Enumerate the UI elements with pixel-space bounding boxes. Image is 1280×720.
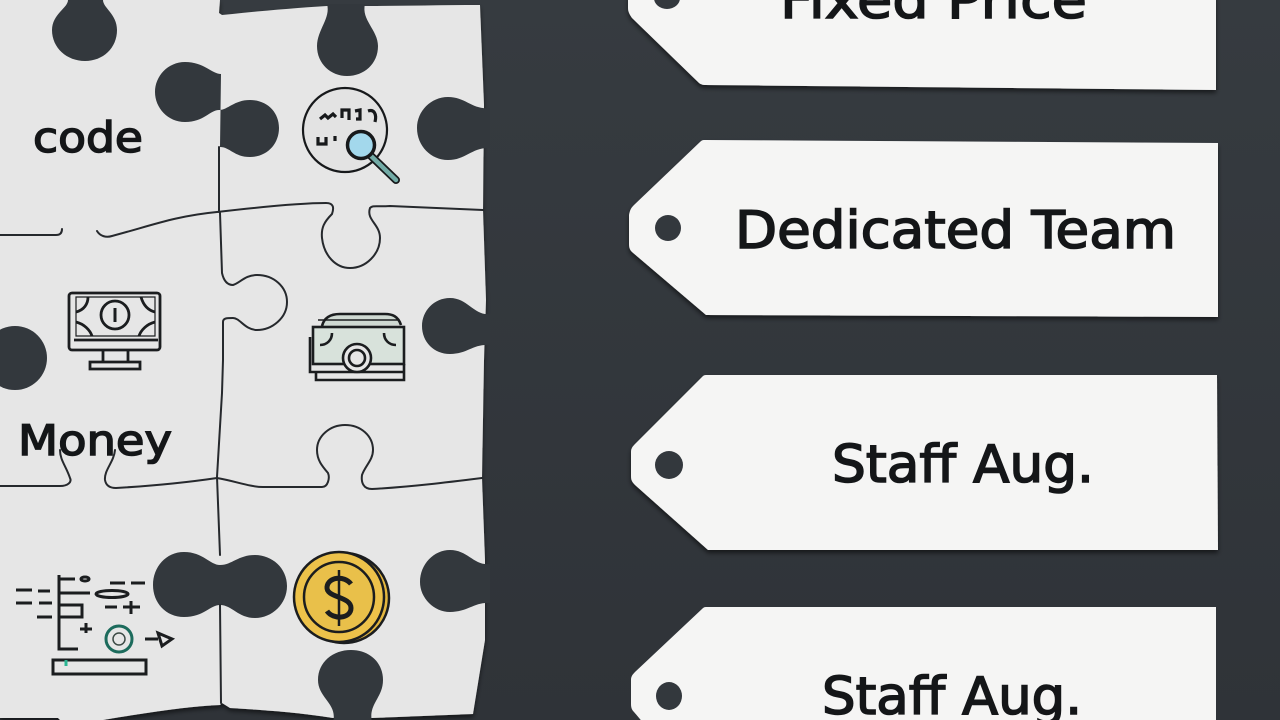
- icon: monitor with banknote: [69, 293, 160, 369]
- tag: Staff Aug.: Staff Aug.: [832, 435, 1094, 495]
- puzzle holes: [0, 0, 490, 720]
- icon: flow diagram: [16, 575, 172, 674]
- label: Money: Money: [18, 416, 172, 465]
- icon: gold coin: [294, 552, 389, 643]
- tag: Staff Aug. lower: [631, 607, 1216, 720]
- label: code: code: [33, 113, 143, 162]
- puzzle seams: [0, 147, 483, 703]
- tag: Dedicated Team: [629, 140, 1218, 317]
- tag: Dedicated Team: Dedicated Team: [735, 201, 1176, 261]
- icon: magnifier over code: [303, 88, 396, 180]
- puzzle base shape: [0, 0, 486, 720]
- tag: Staff Aug.: [631, 375, 1218, 550]
- tag: Fixed Price: [628, 0, 1216, 90]
- icon: stack of cash: [310, 314, 404, 380]
- panel: jigsaw puzzle: [0, 0, 490, 720]
